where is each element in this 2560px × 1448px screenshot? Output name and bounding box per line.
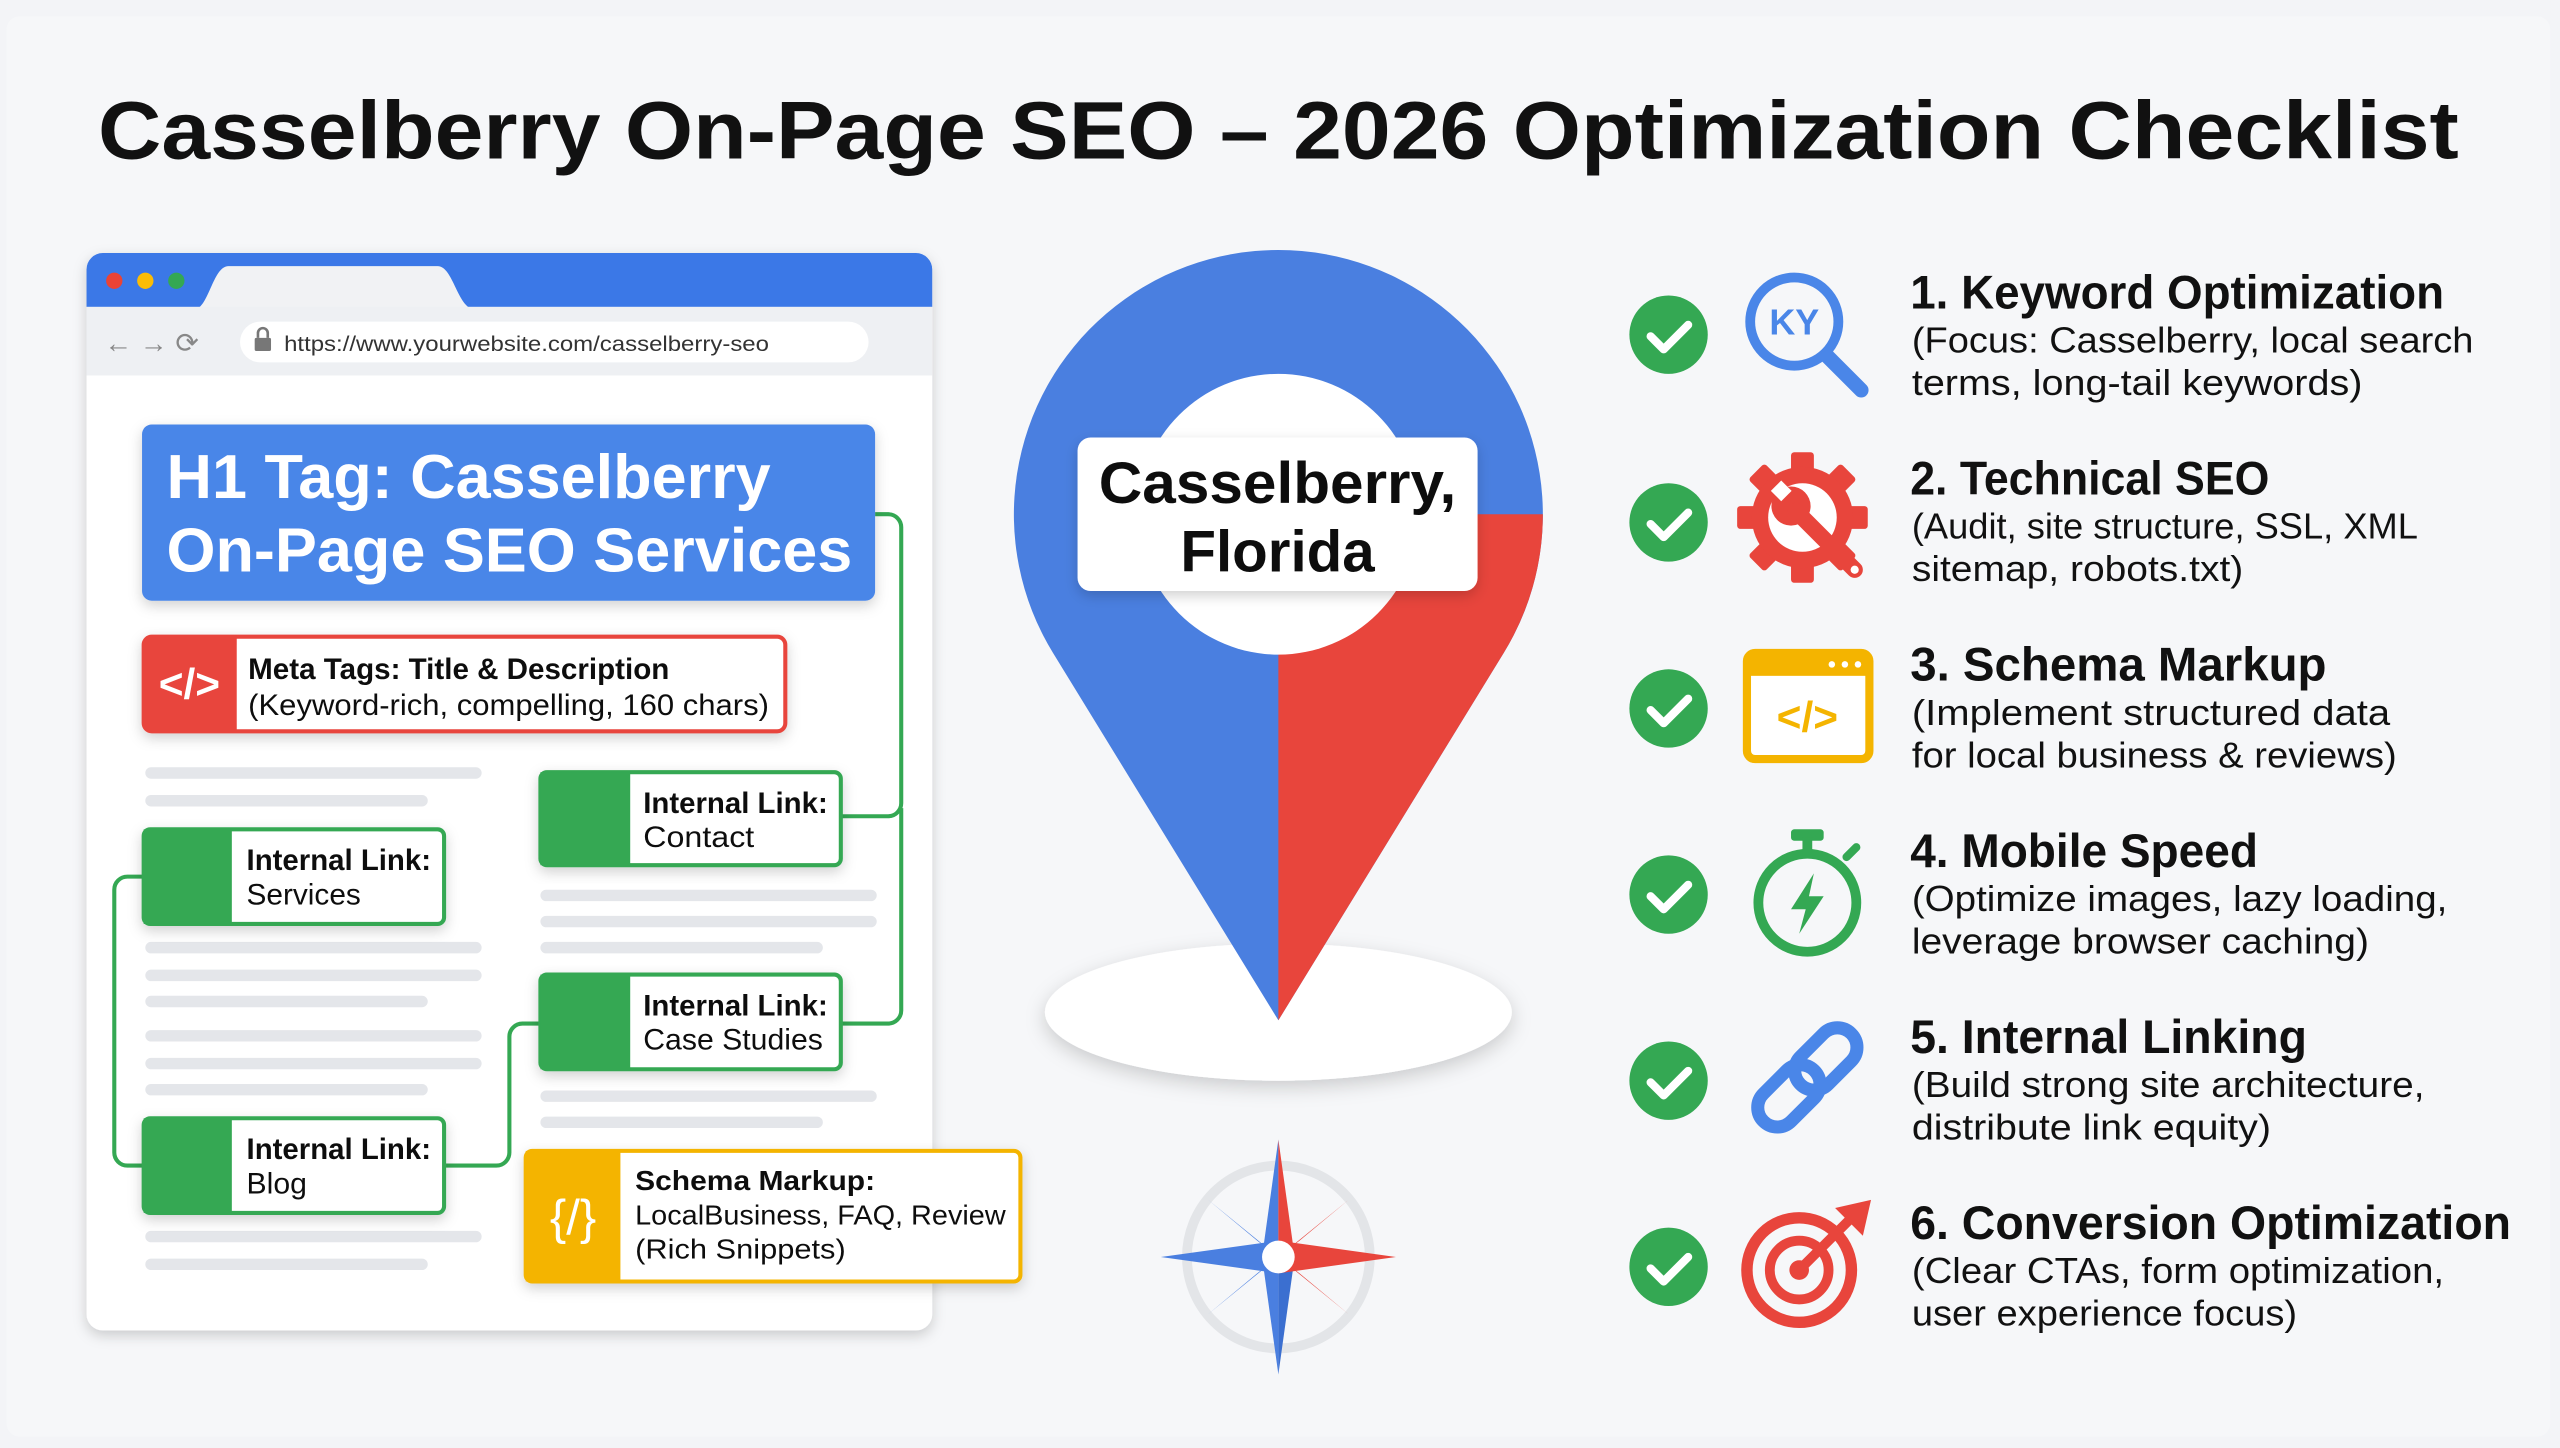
icon: nav arrows: ← → ⟳ xyxy=(104,328,199,359)
schema markup box: Schema Markup: xyxy=(635,1165,875,1196)
gray text lines xyxy=(145,767,877,1270)
checklist item 3 xyxy=(1629,639,2397,775)
pin base shadow ellipse xyxy=(1045,944,1512,1081)
checklist item 5 xyxy=(1629,1011,2424,1147)
H1 tag box: On-Page SEO Services xyxy=(167,516,852,585)
checklist item 3: for local business & reviews) xyxy=(1912,734,2397,775)
title: Casselberry On-Page SEO – 2026 Optimization Checklist xyxy=(98,85,2459,176)
icon: magnifier KY: KY xyxy=(1769,302,1819,343)
H1 tag box: H1 Tag: Casselberry xyxy=(167,443,771,512)
checklist item 6 xyxy=(1629,1197,2511,1334)
checklist item 4: leverage browser caching) xyxy=(1912,920,2369,961)
meta tags box xyxy=(144,637,785,731)
checklist item 4: 4. Mobile Speed xyxy=(1910,825,2258,878)
checklist item 2: 2. Technical SEO xyxy=(1910,453,2269,506)
internal link: contact xyxy=(540,772,841,865)
schema markup box: (Rich Snippets) xyxy=(635,1234,846,1265)
checklist item 6: (Clear CTAs, form optimization, xyxy=(1912,1250,2444,1291)
panel: browser window xyxy=(87,253,932,1330)
internal link: case studies xyxy=(540,975,841,1069)
internal link: blog: Internal Link: xyxy=(247,1133,431,1166)
checklist item 2 xyxy=(1629,452,2418,589)
pin label: Casselberry, xyxy=(1099,451,1456,516)
internal link: services xyxy=(144,829,444,924)
checklist item 1: terms, long-tail keywords) xyxy=(1912,362,2362,403)
meta tags box: (Keyword-rich, compelling, 160 chars) xyxy=(248,689,769,722)
map pin xyxy=(1014,250,1543,1020)
meta tags box: </> xyxy=(159,661,220,708)
pin label: Florida xyxy=(1180,519,1376,584)
schema markup box xyxy=(526,1151,1020,1281)
internal link: case studies: Case Studies xyxy=(643,1024,823,1057)
internal link: contact: Contact xyxy=(643,821,754,854)
icon: chain link xyxy=(1750,1020,1865,1135)
checklist item 3: (Implement structured data xyxy=(1912,692,2390,733)
schema markup box: LocalBusiness, FAQ, Review xyxy=(635,1199,1007,1230)
internal link: contact: Internal Link: xyxy=(643,787,828,820)
url bar: https://www.yourwebsite.com/casselberry-seo xyxy=(284,333,769,356)
icon: gear wrench xyxy=(1737,452,1868,583)
checklist item 1: 1. Keyword Optimization xyxy=(1910,267,2444,320)
icon: compass xyxy=(1161,1139,1396,1375)
pin label xyxy=(1078,438,1478,591)
url bar xyxy=(240,322,869,362)
icon: stopwatch xyxy=(1758,829,1856,952)
checklist item 1 xyxy=(1629,267,2473,403)
icon: code window xyxy=(1747,653,1869,759)
internal link: blog: Blog xyxy=(247,1167,307,1200)
checklist item 2: sitemap, robots.txt) xyxy=(1912,548,2243,589)
internal link: services: Internal Link: xyxy=(247,844,431,877)
schema markup box: {/} xyxy=(550,1191,596,1245)
internal link: case studies: Internal Link: xyxy=(643,989,828,1022)
checklist item 5: (Build strong site architecture, xyxy=(1912,1064,2424,1105)
internal link: blog xyxy=(144,1118,444,1213)
icon: magnifier KY xyxy=(1750,278,1861,390)
checklist item 2: (Audit, site structure, SSL, XML xyxy=(1912,506,2418,547)
internal link: services: Services xyxy=(247,878,361,911)
checklist item 5: distribute link equity) xyxy=(1912,1106,2271,1147)
connector lines xyxy=(114,514,901,1166)
meta tags box: Meta Tags: Title & Description xyxy=(248,653,669,686)
checklist item 4: (Optimize images, lazy loading, xyxy=(1912,878,2447,919)
checklist item 3: 3. Schema Markup xyxy=(1910,639,2327,692)
checklist item 5: 5. Internal Linking xyxy=(1910,1011,2307,1064)
checklist item 4 xyxy=(1629,825,2447,961)
checklist item 1: (Focus: Casselberry, local search xyxy=(1912,320,2473,361)
checklist item 6: user experience focus) xyxy=(1912,1293,2297,1334)
checklist item 6: 6. Conversion Optimization xyxy=(1910,1197,2511,1250)
icon: target with arrow xyxy=(1747,1200,1871,1322)
icon: code window: </> xyxy=(1777,693,1838,740)
H1 tag box xyxy=(142,424,875,601)
